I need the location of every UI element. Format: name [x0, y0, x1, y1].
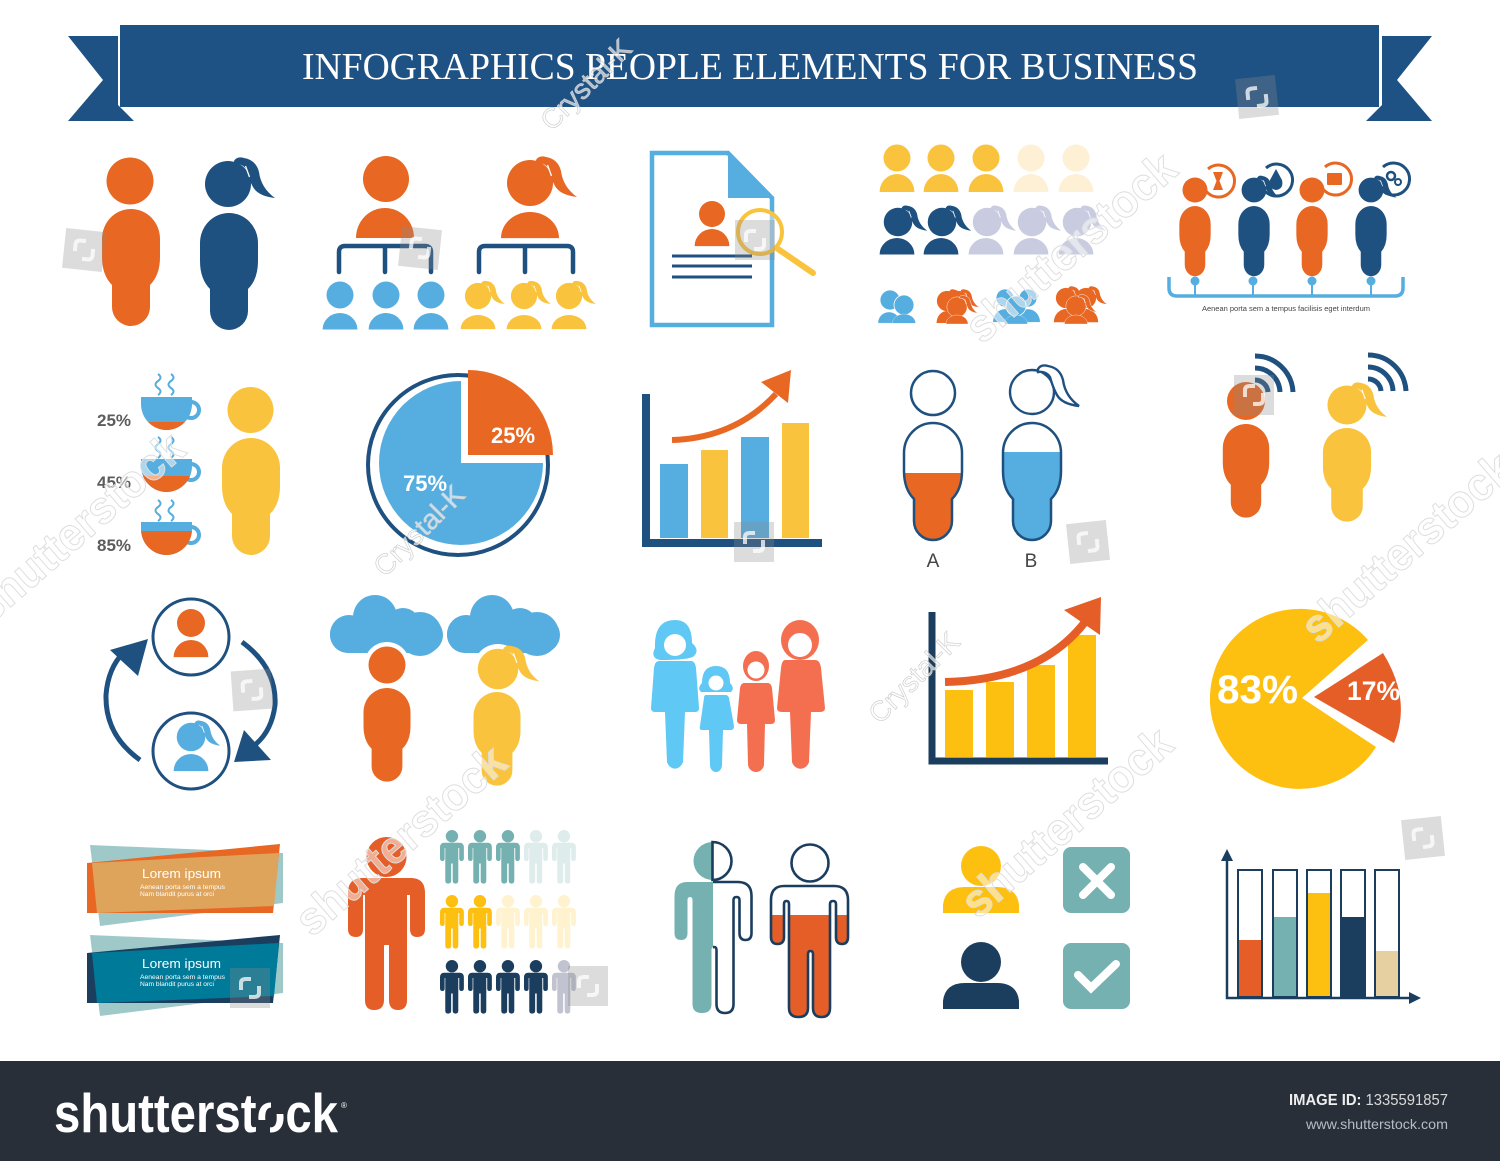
- footer bar: shutterstock: [54, 1082, 338, 1144]
- icon: half-filled teal man: [674, 842, 752, 1013]
- footer bar: ®: [341, 1101, 347, 1110]
- icon: large man figure: [348, 837, 425, 1010]
- title banner: INFOGRAPHICS PEOPLE ELEMENTS FOR BUSINESS: [302, 46, 1198, 88]
- title banner: [68, 25, 1432, 121]
- icon: exchange cycle between two people: [106, 599, 275, 789]
- icon: small people groups: [878, 286, 1107, 324]
- text banner: teal: Aenean porta sem a tempus: [140, 975, 225, 981]
- text banner: orange: Lorem ipsum: [142, 867, 221, 881]
- pictogram rows of people: [440, 830, 576, 1014]
- icon: A and B outlined figures: A: [927, 551, 940, 572]
- watermark overlays: Crystal-K: [862, 626, 966, 729]
- icon: coffee cups with percentages: 45%: [97, 473, 131, 492]
- icon: navy user with check: [943, 942, 1130, 1009]
- bar chart: five outlined columns: [1221, 849, 1421, 1004]
- icon: woman under cloud: [447, 595, 560, 786]
- icon: family of four: [651, 620, 825, 772]
- pie chart: 75% and 25%: 25%: [491, 423, 535, 448]
- watermark overlays: shutterstock: [954, 141, 1187, 353]
- watermark overlays: shutterstock: [950, 716, 1183, 928]
- icon: A and B outlined figures: [904, 365, 1079, 572]
- icon: four people timeline: Aenean porta sem a tempus facilisis eget interdum: [1202, 306, 1370, 313]
- watermark overlays: Crystal-K: [367, 479, 471, 582]
- pie chart: 83% and 17%: 83%: [1217, 668, 1298, 712]
- icon: people proportion grid: [880, 144, 1106, 254]
- text banner: orange: Aenean porta sem a tempus: [140, 885, 225, 891]
- watermark overlays: shutterstock: [284, 734, 517, 946]
- text banner: teal: Nam blandit purus at orci: [140, 982, 214, 988]
- footer bar: IMAGE ID: 1335591857: [1289, 1092, 1448, 1109]
- icon: female team hierarchy: [461, 156, 596, 329]
- icon: male team hierarchy: [323, 156, 448, 330]
- pie chart: 83% and 17%: 17%: [1347, 676, 1400, 706]
- bar chart with large arrow: [932, 597, 1108, 761]
- text banner: orange: [87, 844, 283, 926]
- icon: half-filled orange man: [771, 844, 848, 1017]
- icon: coffee cups with percentages: [97, 374, 280, 556]
- pie chart: 75% and 25%: 75%: [403, 471, 447, 496]
- icon: coffee cups with percentages: 25%: [97, 411, 131, 430]
- icon: yellow user with cross: [943, 846, 1130, 913]
- text banner: teal: [87, 935, 283, 1016]
- icon: man under cloud: [330, 595, 443, 782]
- bar chart with rising arrow: [646, 370, 822, 543]
- icon: man and woman pair: [102, 157, 275, 330]
- icon: coffee cups with percentages: 85%: [97, 536, 131, 555]
- icon: four people timeline: [1169, 163, 1410, 313]
- watermark overlays: Crystal-K: [534, 33, 638, 136]
- pie chart: 83% and 17%: [1210, 609, 1401, 789]
- icon: A and B outlined figures: B: [1025, 551, 1037, 572]
- footer bar: www.shutterstock.com: [1305, 1116, 1448, 1132]
- footer bar: [0, 1061, 1500, 1161]
- text banner: teal: Lorem ipsum: [142, 957, 221, 971]
- icon: resume document with magnifier: [652, 153, 813, 325]
- icon: figures with wifi signals: [1223, 355, 1406, 522]
- pie chart: 75% and 25%: [368, 370, 553, 555]
- text banner: orange: Nam blandit purus at orci: [140, 892, 214, 898]
